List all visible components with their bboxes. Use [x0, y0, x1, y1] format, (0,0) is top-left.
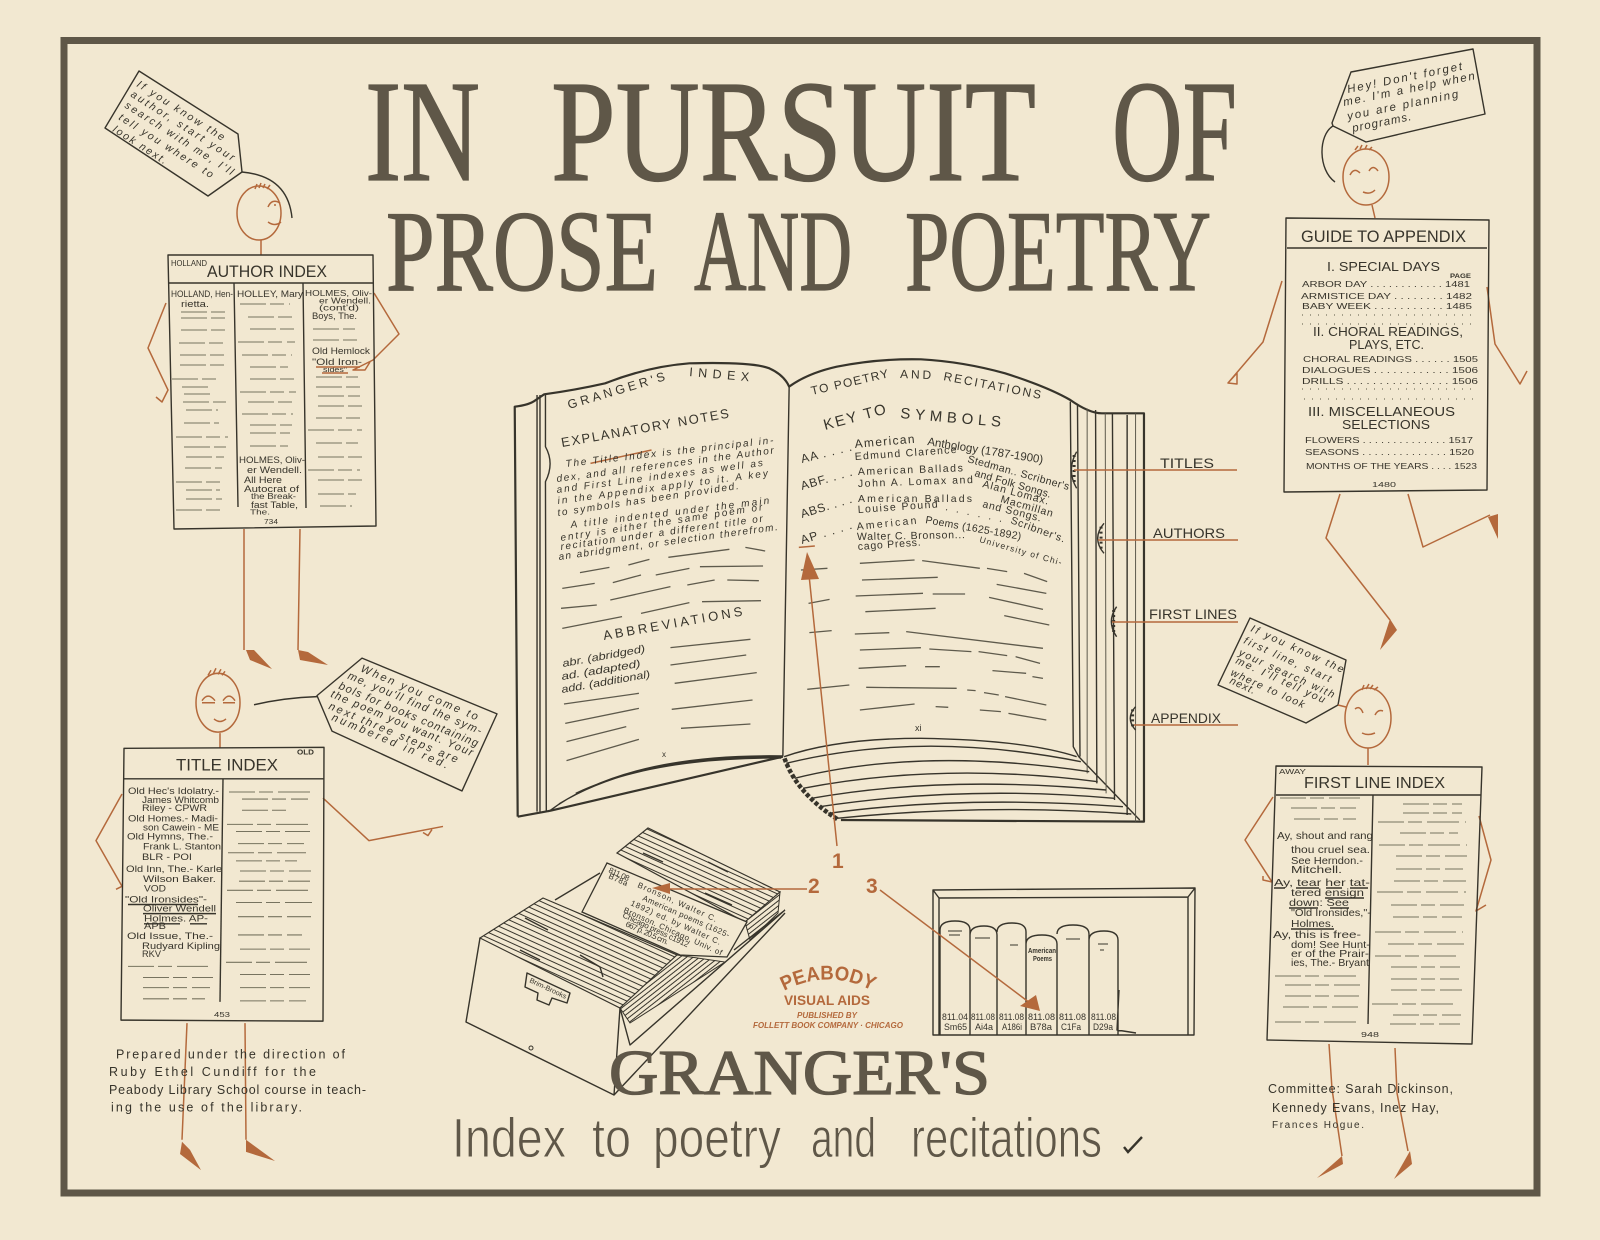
author index card: Old Hemlock — [312, 346, 371, 356]
book outline and pages — [515, 359, 1144, 822]
bookshelf: 811.08 — [1059, 1012, 1086, 1023]
right page text: Stedman.. Scribner's — [966, 453, 1071, 493]
speech bubble: first line: me. I'll tell you — [1234, 655, 1327, 706]
lower card edges — [620, 955, 725, 1023]
left page text: A title indented under the main — [569, 496, 770, 531]
figure: first line index character — [1218, 618, 1491, 1179]
catalog card: 811.08 — [607, 866, 631, 883]
left page text: an abridgment, or selection therefrom. — [558, 522, 778, 563]
publisher logo: FOLLETT BOOK COMPANY · CHICAGO — [753, 1020, 903, 1030]
right page text: AND — [900, 367, 932, 382]
arrow 2: to card catalog: 2 — [808, 875, 820, 898]
credit: prepared under: Peabody Library School course in teach- — [109, 1083, 366, 1097]
appendix guide card: PLAYS, ETC. — [1349, 337, 1424, 352]
left page text: EXPLANATORY NOTES — [560, 406, 730, 450]
arrow 1: to book key: 1 — [832, 850, 844, 873]
book thumb index labels: APPENDIX — [1151, 710, 1222, 726]
stack edge — [745, 892, 780, 940]
author index card: HOLMES, Oliv- — [239, 455, 305, 465]
appendix guide card: FLOWERS . . . . . . . . . . . . . . 1517 — [1305, 435, 1473, 445]
title index card: Old Hymns, The.- — [127, 832, 213, 843]
bookshelf: A186i — [1002, 1022, 1022, 1033]
bookshelf: 811.04 — [942, 1012, 968, 1023]
title index card: VOD — [144, 883, 166, 894]
speech bubble: appendix: Hey! Don't forget — [1346, 61, 1464, 96]
credit: committee: Frances Hogue. — [1272, 1120, 1364, 1131]
right page text: Scribner's. — [1009, 515, 1067, 545]
speech bubble: symbols: the poem you want. Your — [329, 688, 476, 760]
front card stack — [480, 898, 677, 1008]
left page text: add. (additional) — [560, 669, 651, 696]
right page text: . . . . . . — [944, 501, 1004, 525]
first line index card: Ay, shout and rang — [1277, 830, 1373, 842]
speech bubble: appendix: you are planning — [1345, 89, 1460, 123]
first line index card: down: See — [1289, 897, 1349, 909]
open book illustration — [515, 359, 1144, 822]
bookshelf: C1Fa — [1061, 1022, 1082, 1033]
first line index card: 948 — [1361, 1030, 1379, 1039]
first line index card: Holmes. — [1291, 918, 1334, 930]
left page text: recitation under a different title or — [560, 514, 764, 553]
title index card: RKV — [142, 949, 162, 960]
appendix guide card: 1480 — [1372, 482, 1396, 489]
speech bubble: first line: If you know the — [1249, 623, 1346, 676]
speech bubble: appendix: programs. — [1350, 111, 1412, 135]
title: PURSUIT — [551, 52, 1036, 212]
author index card: fast Table, — [251, 500, 298, 510]
footer title: GRANGER'S — [609, 1037, 990, 1108]
bookshelf: 811.08 — [1028, 1012, 1055, 1023]
bookshelf: Poems — [1033, 956, 1052, 963]
first line index card: thou cruel sea. — [1291, 844, 1370, 856]
credit: prepared under: Prepared under the direction of — [116, 1048, 345, 1062]
left page text: to symbols has been provided. — [557, 481, 739, 519]
left page text: GRANGER'S — [566, 370, 667, 412]
right page text: xi — [915, 723, 922, 733]
first line index card: dom! See Hunt- — [1291, 939, 1371, 951]
author index card: 734 — [264, 519, 278, 526]
bookshelf: 811.08 — [1091, 1012, 1116, 1023]
appendix guide card: BABY WEEK . . . . . . . . . . . 1485 — [1302, 301, 1472, 311]
title index card: TITLE INDEX — [176, 757, 278, 775]
speech bubble: first line: first line, start — [1242, 635, 1334, 686]
appendix guide card: ARBOR DAY . . . . . . . . . . . . 1481 — [1302, 279, 1470, 289]
right page text: American — [854, 432, 915, 451]
speech bubble: first line — [1218, 618, 1346, 723]
arrow 3: to bookshelf: 3 — [866, 875, 878, 898]
stick figure body — [1228, 145, 1527, 650]
author index card: HOLLEY, Mary — [237, 289, 304, 299]
speech bubble: first line: your search with — [1236, 646, 1337, 701]
speech bubble: first line: next. — [1228, 675, 1257, 697]
catalog card: American poems (1625- — [641, 894, 731, 940]
title index card: Wilson Baker. — [143, 874, 216, 885]
arrow 2: to card catalog — [652, 875, 820, 898]
title index card: Oliver Wendell — [143, 904, 216, 915]
appendix guide card: GUIDE TO APPENDIX — [1301, 228, 1466, 246]
arrow 1: to book key — [801, 552, 844, 873]
left page text: ad. (adapted) — [561, 658, 641, 683]
first line index card: AWAY — [1279, 769, 1306, 776]
author index card: HOLLAND — [171, 259, 207, 268]
right page text: cago Press. — [857, 537, 921, 553]
appendix guide card: SEASONS . . . . . . . . . . . . . . 1520 — [1305, 447, 1474, 457]
bookshelf: Sm65 — [944, 1022, 967, 1033]
footer title: to — [592, 1106, 631, 1169]
title index card: BLR - POI — [142, 852, 192, 863]
left page text: abr. (abridged) — [561, 643, 646, 670]
speech bubble: author: author, start your — [128, 88, 237, 164]
publisher logo: VISUAL AIDS — [784, 992, 870, 1008]
title index card: Holmes. AP- — [144, 914, 208, 925]
speech bubble: author: tell you where to — [116, 111, 216, 181]
title index card: Old Homes.- Madi- — [128, 813, 218, 824]
credit: committee — [1268, 1082, 1453, 1131]
right page text: Macmillan — [999, 493, 1055, 520]
speech bubble: symbols: numbered in red. — [330, 712, 450, 771]
credit: prepared under — [109, 1048, 366, 1114]
appendix guide card: MONTHS OF THE YEARS . . . . 1523 — [1306, 461, 1477, 471]
title: POETRY — [905, 188, 1211, 316]
book thumb index labels — [1074, 455, 1238, 726]
right page text: American — [856, 515, 917, 533]
first line index card — [1267, 766, 1482, 1044]
right page text: John A. Lomax and — [858, 474, 973, 490]
appendix guide card — [1284, 218, 1489, 492]
right page text: Anthology (1787-1900) — [927, 436, 1044, 466]
catalog card: B78a — [607, 872, 630, 888]
left page text: INDEX — [689, 365, 750, 384]
left page text: entry is either the same poem or — [560, 502, 764, 544]
author index card: HOLLAND, Hen- — [171, 289, 233, 299]
catalog card: Chicago press c1912 — [621, 911, 691, 949]
author index card: All Here — [244, 475, 282, 485]
speech bubble: author: search with me, I'll — [122, 99, 236, 178]
first line index card: er of the Prair- — [1291, 948, 1370, 960]
speech bubble: first line: where to look — [1229, 667, 1307, 711]
right page text: Walter C. Bronson... — [857, 529, 965, 543]
left page text: ABBREVIATIONS — [602, 604, 744, 643]
first line index card: "Old Ironsides,"- — [1291, 907, 1372, 919]
right page text: TO POETRY — [810, 367, 890, 398]
credit: prepared under: Ruby Ethel Cundiff for the — [109, 1065, 316, 1079]
speech bubble: author: If you know the — [134, 78, 227, 144]
rear card stack — [617, 828, 780, 922]
left page text: in the Appendix apply to it. A key — [557, 468, 770, 507]
author index card: "Old Iron- — [312, 357, 362, 367]
appendix guide card: PAGE — [1450, 273, 1472, 280]
appendix guide card: II. CHORAL READINGS, — [1313, 324, 1463, 339]
speech bubble: author: look next. — [110, 123, 169, 167]
right page text: AA . . . . — [799, 440, 853, 466]
title index card: "Old Ironsides"- — [125, 894, 207, 906]
left page text: dex, and all references in the Author — [556, 445, 775, 485]
footer title: recitations — [911, 1106, 1102, 1169]
author index card: sides" — [323, 365, 347, 374]
right page text: American Ballads — [858, 462, 963, 478]
figure: title index character — [96, 658, 497, 1170]
appendix guide card: SELECTIONS — [1342, 417, 1430, 432]
footer title: Index — [452, 1106, 566, 1169]
title index card: 453 — [214, 1012, 230, 1019]
title: PROSE — [386, 188, 658, 316]
title: OF — [1112, 52, 1237, 212]
right page text: KEY TO — [822, 401, 888, 434]
publisher logo: PUBLISHED BY — [797, 1011, 858, 1020]
speech bubble: symbols: When you come to — [359, 663, 480, 723]
left page text: x — [662, 750, 666, 759]
right page text: and Songs. — [981, 498, 1042, 524]
right page text: Poems (1625-1892) — [924, 514, 1022, 543]
author index card: (cont'd) — [319, 304, 359, 312]
book thumb index labels: FIRST LINES — [1149, 606, 1237, 622]
catalog card: 667 p. 20.5 cm. — [624, 920, 670, 947]
right page text: RECITATIONS — [942, 369, 1042, 402]
author index card: rietta. — [181, 299, 209, 309]
author index card: Autocrat of — [244, 484, 300, 494]
first line index card: Ay, tear her tat- — [1274, 877, 1371, 889]
arrow 3: to bookshelf — [866, 875, 1040, 1011]
author index card — [168, 255, 376, 529]
right page text: AP . . . . — [799, 518, 854, 547]
title: AND — [694, 188, 852, 316]
right page text: ABS. . . . — [799, 492, 854, 521]
footer title: and — [811, 1106, 876, 1169]
author index card: HOLMES, Oliv- — [305, 289, 372, 298]
appendix guide card: DRILLS . . . . . . . . . . . . . . . . 1506 — [1302, 376, 1478, 386]
right page text: and Folk Songs. — [973, 467, 1052, 501]
right page text: Edmund Clarence — [854, 444, 957, 463]
right page text: Louise Pound — [857, 498, 938, 516]
appendix guide card: CHORAL READINGS . . . . . . 1505 — [1303, 354, 1478, 364]
title index card: Old Inn, The.- Karle — [126, 864, 222, 875]
first line index card: Mitchell. — [1291, 864, 1342, 876]
first line index card: Ay, this is free- — [1273, 929, 1362, 941]
speech bubble: symbols — [254, 658, 497, 791]
credit: committee: Committee: Sarah Dickinson, — [1268, 1082, 1453, 1096]
title — [365, 52, 1237, 316]
title index card: APB — [144, 921, 166, 932]
left page text: The Title Index is the principal in- — [565, 435, 775, 470]
stick figure body — [1245, 684, 1491, 1179]
footer title: poetry — [653, 1106, 781, 1169]
speech bubble: symbols: next three steps are — [327, 700, 460, 766]
book thumb index labels: TITLES — [1160, 455, 1214, 471]
bookshelf: 811.08 — [999, 1012, 1024, 1023]
right page text — [799, 367, 1071, 733]
catalog card — [555, 863, 747, 958]
bookshelf: D29a — [1093, 1022, 1114, 1033]
title index card: James Whitcomb — [142, 795, 219, 806]
speech bubble: appendix: me. I'm a help when — [1342, 70, 1476, 109]
card catalog drawer — [466, 828, 785, 1095]
catalog card: 1892) ed. by Walter C. — [629, 899, 722, 947]
drawer body: Brim-Brooks — [528, 977, 568, 1001]
right page text: SYMBOLS — [900, 405, 1002, 431]
title index card: OLD — [297, 749, 314, 756]
first line index card: See Herndon.- — [1291, 855, 1364, 867]
title: IN — [365, 52, 480, 212]
title index card: Frank L. Stanton — [143, 842, 221, 853]
publisher logo: PEABODY — [780, 966, 878, 990]
book thumb index labels: AUTHORS — [1153, 525, 1225, 541]
left page text — [556, 365, 778, 759]
title index card: son Cawein - ME — [143, 822, 219, 834]
catalog card: Bronson, Walter C. — [636, 881, 718, 924]
catalog card: Bronson. Chicago, Univ. of — [622, 906, 724, 958]
appendix guide card: ARMISTICE DAY . . . . . . . . 1482 — [1301, 291, 1472, 301]
author index card: The. — [250, 508, 270, 516]
right page text: ABF. . . . — [799, 465, 854, 493]
title index card: Old Issue, The.- — [127, 931, 213, 942]
author index card: er Wendell. — [319, 296, 371, 306]
credit: prepared under: ing the use of the library. — [111, 1100, 302, 1114]
speech bubble: appendix — [1322, 49, 1485, 182]
speech bubble: symbols: me, you'll find the sym- — [346, 670, 484, 737]
appendix guide card: DIALOGUES . . . . . . . . . . . . 1506 — [1302, 365, 1478, 375]
speech bubble: symbols: bols for books containing — [337, 680, 481, 750]
bookshelf: American — [1028, 948, 1056, 955]
figure: author index character — [105, 71, 399, 669]
bookshelf — [933, 888, 1195, 1035]
bookshelf: 811.08 — [971, 1012, 995, 1023]
title index card: Rudyard Kipling — [142, 941, 220, 952]
publisher logo — [753, 966, 903, 1030]
title index card: Old Hec's Idolatry.- — [128, 786, 219, 797]
left page text: and First Line indexes as well as — [556, 458, 764, 496]
stick figure body — [96, 668, 443, 1170]
credit: committee: Kennedy Evans, Inez Hay, — [1272, 1101, 1439, 1115]
right page text: American Ballads — [858, 493, 972, 505]
author index card: the Break- — [251, 492, 296, 501]
first line index card: FIRST LINE INDEX — [1304, 775, 1445, 792]
bookshelf: B78a — [1030, 1022, 1053, 1033]
figure: appendix guide character — [1228, 49, 1527, 650]
title index card — [121, 747, 324, 1021]
stick figure body — [148, 183, 399, 669]
title index card: Riley - CPWR — [142, 803, 207, 814]
right page text: University of Chi- — [978, 534, 1063, 567]
author index card: er Wendell. — [247, 465, 302, 475]
author index card: Boys, The. — [312, 311, 357, 321]
footer title — [452, 1037, 1142, 1169]
drawer body — [466, 853, 785, 1095]
appendix guide card: III. MISCELLANEOUS — [1308, 404, 1455, 419]
bookshelf: Ai4a — [975, 1022, 994, 1033]
right page text: Alan Lomax. — [981, 478, 1050, 507]
first line index card: tered ensign — [1291, 887, 1364, 899]
appendix guide card: I. SPECIAL DAYS — [1327, 259, 1440, 274]
speech bubble: author — [105, 71, 292, 218]
first line index card: ies, The.- Bryant — [1291, 957, 1369, 969]
author index card: AUTHOR INDEX — [207, 262, 327, 281]
